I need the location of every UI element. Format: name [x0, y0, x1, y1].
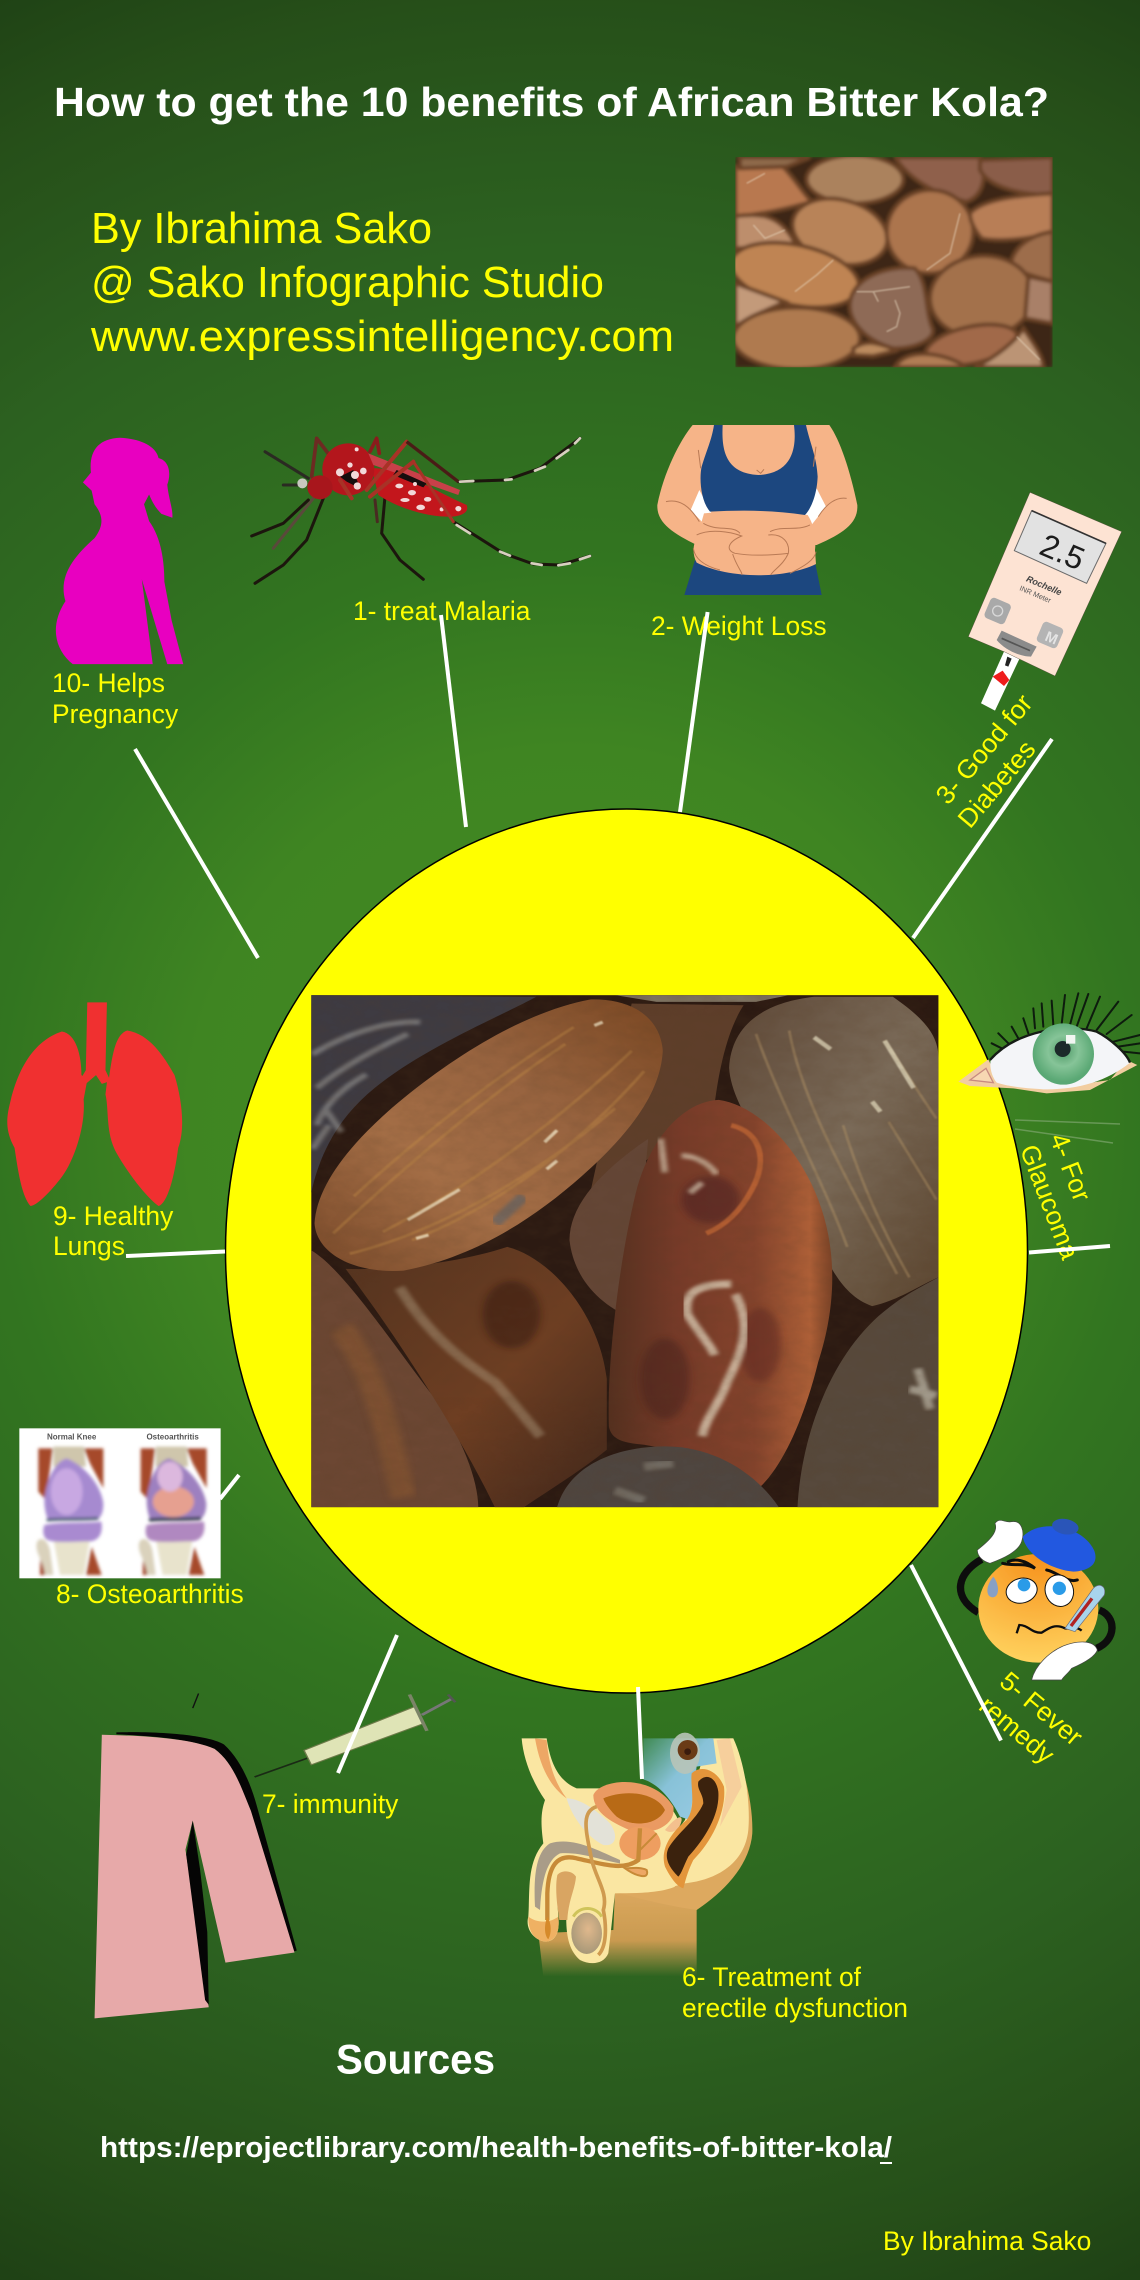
syringe	[255, 1695, 455, 1777]
label: 3: 3- Good for	[930, 688, 1039, 810]
author block: @ Sako Infographic Studio	[91, 258, 604, 307]
label: 10: 10- Helps	[52, 668, 165, 698]
source link: https://eprojectlibrary.com/health-benefits-of-bitter-kola/	[100, 2132, 892, 2164]
lashes	[992, 993, 1140, 1053]
shaft inner grey	[535, 1842, 620, 1910]
glove bottom	[1032, 1642, 1097, 1680]
icon: glucose meter: M	[1042, 629, 1060, 648]
iris	[1033, 1023, 1094, 1085]
grain texture	[311, 995, 938, 1507]
label: 6: 6- Treatment of	[682, 1962, 862, 1992]
skin corner	[958, 1059, 1137, 1093]
tan between shaft and scrotum	[556, 1871, 576, 1920]
reading: 2.5	[1035, 527, 1090, 577]
faint marks under eye	[1015, 1120, 1120, 1143]
face	[978, 1554, 1098, 1663]
brand: Rochelle	[1025, 574, 1063, 597]
eyeball	[990, 1028, 1130, 1089]
author block	[90, 204, 674, 361]
seed main left	[315, 999, 663, 1271]
label: 7: 7- immunity	[262, 1789, 399, 1819]
icon: pregnant woman	[56, 438, 183, 664]
arm	[95, 1735, 295, 2018]
icon: fever emoji	[960, 1517, 1112, 1680]
label: 6	[682, 1962, 908, 2023]
test strip	[981, 652, 1019, 711]
label: 9: 9- Healthy	[53, 1201, 174, 1231]
seed bottom right	[798, 1277, 938, 1507]
icon: glucose meter: INR Meter	[1018, 584, 1053, 605]
label: 4	[1014, 1129, 1115, 1264]
seed behind centre	[569, 1139, 648, 1318]
back outer tan	[620, 1738, 752, 1910]
label: 3: Diabetes	[952, 734, 1041, 833]
icon: arm with syringe	[95, 1694, 455, 2018]
lower tan body	[538, 1887, 697, 1977]
glove top	[977, 1520, 1023, 1563]
label: 9: Lungs	[53, 1231, 125, 1261]
icon: knee comparison	[19, 1428, 221, 1578]
urethra tube	[547, 1828, 640, 1920]
upper vesicle	[670, 1733, 700, 1774]
author block: www.expressintelligency.com	[90, 312, 674, 361]
title: How to get the 10 benefits of African Bitter Kola?	[54, 79, 1049, 125]
label: 3	[927, 688, 1063, 833]
arthritic knee	[139, 1447, 207, 1575]
author block: By Ibrahima Sako	[91, 204, 432, 253]
fold lines	[666, 447, 847, 575]
top	[701, 425, 818, 515]
prostate	[619, 1827, 661, 1860]
label: 1: 1- treat Malaria	[353, 596, 531, 626]
label: 2: 2- Weight Loss	[651, 611, 827, 641]
arms and torso	[657, 425, 857, 545]
lower pants	[684, 560, 822, 595]
buttons	[983, 597, 1012, 625]
seed centre main	[609, 1100, 832, 1487]
label: 5: remedy	[974, 1690, 1061, 1770]
testis	[571, 1913, 602, 1954]
link underline	[880, 2162, 892, 2164]
icon: male anatomy	[522, 1733, 752, 1977]
seed upper middle back	[590, 1004, 744, 1193]
bladder	[593, 1782, 674, 1832]
seed top right	[729, 997, 938, 1306]
icon: knee comparison: Osteoarthritis	[146, 1433, 199, 1442]
slot	[997, 631, 1037, 657]
bone and glands	[567, 1798, 615, 1845]
ice bag	[1023, 1526, 1095, 1572]
meter body	[968, 492, 1122, 676]
thermometer	[1065, 1585, 1105, 1632]
label: 4: Glaucoma	[1014, 1140, 1085, 1264]
label: 10	[52, 668, 179, 729]
label: 5	[974, 1666, 1089, 1776]
label: 9	[53, 1201, 174, 1261]
arm slit shadow	[186, 1821, 209, 2005]
eyebrows	[1003, 1560, 1077, 1581]
label: 8: 8- Osteoarthritis	[56, 1579, 244, 1609]
mosquito legs	[252, 438, 590, 583]
belly	[694, 511, 816, 575]
white gaps	[691, 488, 826, 526]
label: 4: 4- For	[1044, 1129, 1097, 1206]
mouth	[1017, 1625, 1082, 1633]
seed lower middle	[346, 1247, 607, 1507]
label: 10: Pregnancy	[52, 699, 179, 729]
seed lower left	[311, 1250, 478, 1507]
blue cavity	[643, 1738, 717, 1820]
cream tissue	[522, 1738, 678, 1963]
connector lines	[126, 612, 1110, 1779]
icon: weight loss belly	[657, 425, 857, 595]
footer credit: By Ibrahima Sako	[883, 2226, 1091, 2256]
photo: bitter kola seeds large	[311, 995, 938, 1507]
label: 6: erectile dysfunction	[682, 1993, 908, 2023]
arm shadow	[116, 1732, 297, 1952]
rectum	[664, 1769, 724, 1888]
icon: mosquito	[252, 438, 590, 583]
label: 5: 5- Fever	[994, 1666, 1089, 1752]
sources heading: Sources	[336, 2036, 495, 2082]
seed bottom centre	[557, 1446, 779, 1507]
icon: eye	[958, 993, 1140, 1093]
central yellow ellipse	[226, 809, 1028, 1693]
photo: bitter kola nuts small	[725, 155, 1053, 373]
eyes	[1003, 1575, 1040, 1607]
icon: lungs	[7, 1002, 182, 1206]
seed upper left dark	[311, 995, 536, 1193]
normal knee	[36, 1447, 103, 1575]
mosquito body	[372, 468, 467, 517]
arms	[960, 1559, 1112, 1648]
sweat drop	[987, 1577, 998, 1597]
icon: knee comparison: Normal Knee	[47, 1433, 97, 1442]
icon: glucose meter	[968, 492, 1122, 711]
screen	[1014, 511, 1106, 583]
